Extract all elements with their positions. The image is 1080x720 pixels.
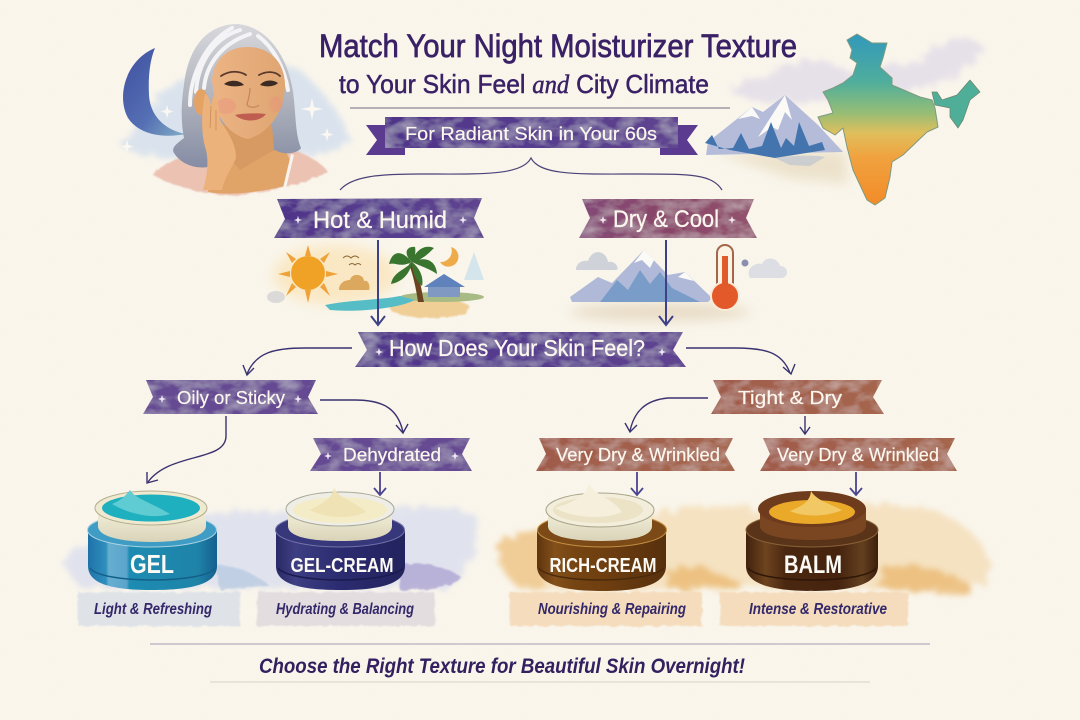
distant tree <box>464 252 484 280</box>
arrow: oily to gel <box>147 416 226 483</box>
blue shadow <box>215 565 270 590</box>
ground wash <box>570 303 750 321</box>
cream surface <box>553 497 643 523</box>
eyes <box>224 81 278 86</box>
illustration: dry cool scene <box>570 245 787 321</box>
ribbon text: For Radiant Skin in Your 60s <box>405 123 657 144</box>
ribbon sparkles <box>375 348 666 356</box>
thermometer bulb <box>711 282 739 310</box>
arrow: very dry to balm <box>850 472 862 495</box>
palm trunk <box>409 262 424 302</box>
ground wash <box>715 150 848 184</box>
caption: balm <box>720 592 908 626</box>
label: How Does Your Skin Feel? <box>389 335 645 361</box>
hair <box>173 24 301 167</box>
thermometer mercury <box>722 256 728 292</box>
ribbon: Hot & Humid <box>274 198 484 238</box>
jar body <box>276 530 405 590</box>
jar label: RICH-CREAM <box>550 555 656 577</box>
jar rim <box>546 493 654 527</box>
purple shadow <box>400 563 462 590</box>
jar neck <box>760 508 866 540</box>
title <box>319 28 797 99</box>
caption text: Intense & Restorative <box>749 601 887 618</box>
wash: warm tones behind jars <box>497 504 990 592</box>
jar: balm <box>746 491 878 591</box>
India mainland <box>818 34 938 205</box>
base groove <box>90 568 215 580</box>
cream peak <box>310 488 366 517</box>
caption text: Nourishing & Repairing <box>538 601 686 618</box>
caption text: Hydrating & Balancing <box>276 601 414 618</box>
ribbon: Dry & Cool <box>579 199 757 238</box>
arrow: skin feel to oily <box>243 348 352 375</box>
mountain back <box>706 95 843 155</box>
jar shoulder <box>538 513 666 547</box>
trees <box>705 122 825 158</box>
illustration: mountains and India map <box>705 34 985 205</box>
snow caps <box>634 250 694 281</box>
sun disc <box>291 256 325 290</box>
cream peak <box>555 484 622 517</box>
jar: gel <box>88 490 217 590</box>
ribbon sparkles <box>324 452 459 460</box>
jar body <box>88 530 217 590</box>
main lilac wash <box>64 505 477 588</box>
hut <box>424 274 465 287</box>
jar rim <box>286 492 394 526</box>
snowy ground <box>775 156 825 166</box>
snow <box>738 95 792 137</box>
arrow: very dry to rich-cream <box>631 472 643 495</box>
label: Dry & Cool <box>613 206 719 233</box>
dots <box>742 260 748 266</box>
jar label: BALM <box>784 551 842 579</box>
hand <box>202 94 236 190</box>
moon <box>440 247 458 267</box>
palm fronds <box>389 247 437 286</box>
jar shoulder <box>276 513 404 547</box>
island <box>400 292 484 302</box>
ribbon tails <box>366 125 698 155</box>
arrow: hot to skin feel <box>371 240 385 325</box>
arrow: tight to left very dry <box>625 398 708 432</box>
ribbon: Oily or Sticky <box>143 380 318 414</box>
jar: rich-cream <box>537 484 666 591</box>
jar: gel-cream <box>276 488 405 590</box>
caption: gel-cream <box>257 592 435 626</box>
jar shoulder <box>88 513 216 547</box>
ribbon sparkles <box>599 216 736 224</box>
arrow: dehydrated to gel-cream <box>374 472 386 495</box>
India northeast <box>932 80 980 128</box>
label: Tight & Dry <box>738 388 842 408</box>
base groove <box>539 568 664 580</box>
balm surface <box>769 500 855 524</box>
label: Oily or Sticky <box>177 388 285 408</box>
back mountains <box>570 250 712 302</box>
orange speckles right <box>668 564 975 592</box>
main warm wash <box>497 504 990 590</box>
face <box>212 47 285 139</box>
neck <box>222 125 274 170</box>
jar neck <box>98 508 206 542</box>
sun rays <box>278 245 338 303</box>
orange speckles left <box>498 532 545 588</box>
watercolor wash behind woman <box>122 63 352 160</box>
ribbon: Very Dry & Wrinkled right <box>760 438 957 471</box>
title line 1: Match Your Night Moisturizer Texture <box>319 28 797 64</box>
finger lines <box>210 106 216 130</box>
arrow: tight to right very dry <box>800 416 810 434</box>
warm wash <box>273 245 397 305</box>
brows <box>221 72 280 76</box>
cream surface <box>293 497 387 523</box>
trees <box>600 270 700 302</box>
ear <box>194 89 208 115</box>
gel peak <box>112 490 170 516</box>
sand cloud <box>339 275 369 290</box>
jar body <box>746 530 878 591</box>
ribbon: Dehydrated <box>310 438 472 471</box>
label: Hot & Humid <box>313 207 447 234</box>
right cloud <box>749 258 787 278</box>
arrow: oily to dehydrated <box>320 400 408 433</box>
subtitle ribbon <box>366 117 698 155</box>
birds <box>343 256 361 265</box>
ribbon: Tight & Dry <box>711 380 884 414</box>
chest <box>208 140 290 194</box>
brace connector <box>340 158 722 190</box>
caption: gel <box>78 592 240 626</box>
balm peak <box>790 491 842 515</box>
ribbon: How Does Your Skin Feel? <box>355 332 686 367</box>
stars <box>120 98 334 153</box>
crescent moon <box>123 48 186 136</box>
title line 2: to Your Skin Feel and City Climate <box>339 69 709 99</box>
arrow: dry to skin feel <box>659 240 673 325</box>
hut body <box>428 287 460 297</box>
jar body <box>537 530 666 591</box>
ribbon sparkles <box>158 395 302 403</box>
label: Very Dry & Wrinkled <box>777 445 939 465</box>
footer tagline: Choose the Right Texture for Beautiful Skin Overnight! <box>259 655 745 678</box>
label: Very Dry & Wrinkled <box>556 445 720 465</box>
ribbon: Very Dry & Wrinkled left <box>536 438 735 471</box>
clouds wash <box>730 37 985 105</box>
ribbon main <box>385 117 678 148</box>
hair highlight strands <box>190 28 288 105</box>
arrow: skin feel to tight <box>686 348 795 374</box>
jar label: GEL <box>130 549 174 579</box>
cheeks <box>216 98 236 114</box>
grey cloud <box>576 252 618 270</box>
wash: cool tones behind jars <box>64 505 477 590</box>
illustration: hot humid scene <box>267 245 484 318</box>
nose <box>247 88 259 107</box>
shoulders and top <box>152 146 328 196</box>
thermometer tube <box>717 245 733 300</box>
sand <box>390 298 470 318</box>
jar neck <box>548 508 652 541</box>
jar rim <box>758 491 866 527</box>
strap <box>283 154 294 188</box>
label: Dehydrated <box>343 445 441 465</box>
lips <box>235 113 266 121</box>
base groove <box>278 568 403 580</box>
jar neck <box>288 508 392 541</box>
gel surface <box>102 494 200 522</box>
jar shoulder <box>746 513 878 547</box>
ribbon sparkles <box>294 216 467 224</box>
illustration: crescent moon and woman <box>120 24 352 196</box>
grey cloud <box>267 291 285 303</box>
water <box>325 296 415 311</box>
jar rim <box>95 491 207 525</box>
caption text: Light & Refreshing <box>94 601 212 618</box>
jar label: GEL-CREAM <box>290 555 394 577</box>
base groove <box>748 568 876 580</box>
caption: rich-cream <box>510 592 702 626</box>
